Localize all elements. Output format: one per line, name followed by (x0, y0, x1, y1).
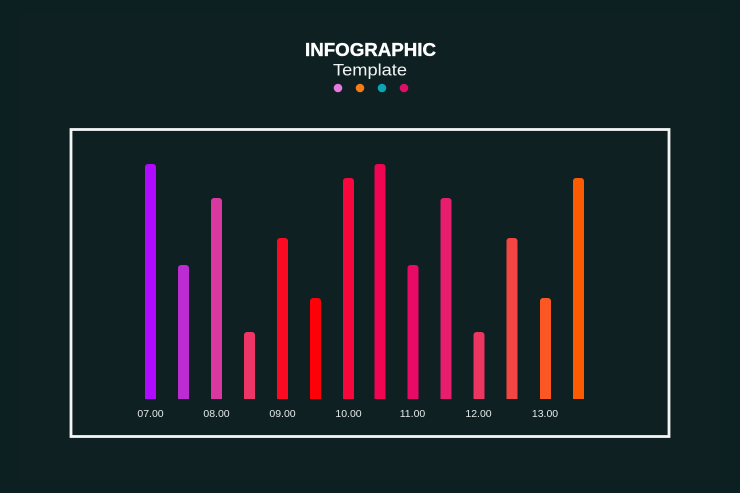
subtitle: Template (333, 62, 407, 80)
time axis labels: 10.00 (335, 408, 362, 420)
time axis labels: 13.00 (532, 408, 558, 420)
legend dots (334, 84, 408, 92)
chart frame (71, 130, 669, 436)
title: INFOGRAPHIC (305, 40, 436, 60)
bar chart (145, 164, 584, 399)
time axis labels: 08.00 (203, 408, 230, 420)
time axis labels: 11.00 (400, 408, 425, 420)
time axis labels (137, 408, 558, 420)
time axis labels: 12.00 (465, 408, 492, 420)
time axis labels: 07.00 (137, 408, 164, 420)
time axis labels: 09.00 (269, 408, 296, 420)
